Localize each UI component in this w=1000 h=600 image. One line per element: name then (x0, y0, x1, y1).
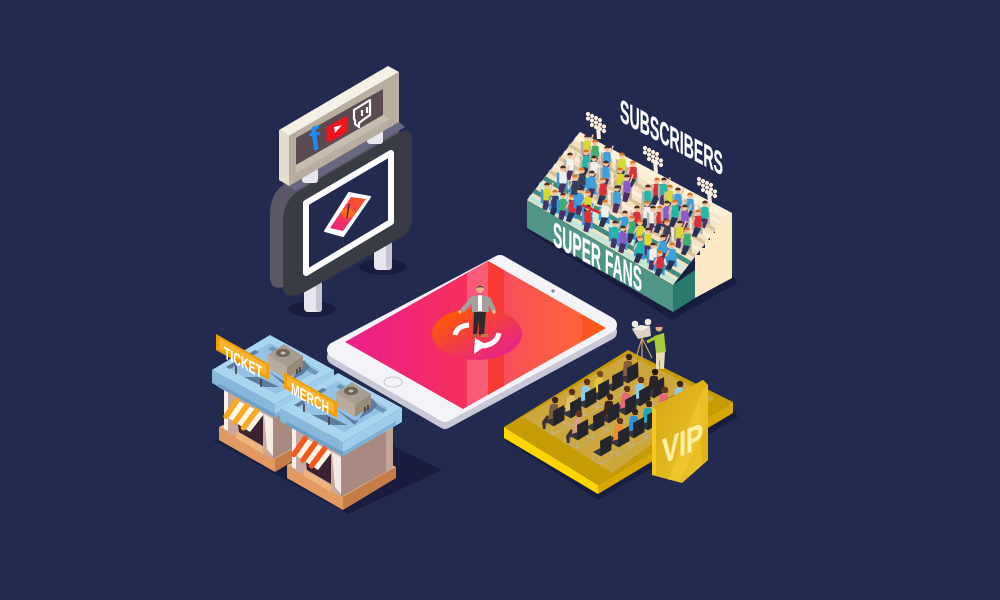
presenter (458, 285, 496, 337)
billboard (270, 66, 412, 317)
screen side face (270, 123, 399, 288)
stadium top walkway (575, 132, 732, 220)
tablet (335, 255, 610, 421)
stadium shadow (523, 228, 737, 320)
billboard legs (304, 235, 392, 312)
floodlights (586, 112, 717, 204)
icon: youtube (328, 118, 346, 141)
icon: phone (325, 193, 370, 236)
stores (212, 334, 442, 514)
top sign (279, 66, 399, 186)
camera operator (647, 324, 666, 369)
screen front face (283, 131, 412, 296)
tablet side (335, 270, 609, 421)
billboard leg shadows (288, 259, 407, 317)
vip shield (652, 380, 708, 483)
vip platform (504, 350, 733, 494)
white screen frame (306, 153, 391, 273)
stadium dark corner (673, 270, 695, 312)
icon: facebook: f (307, 119, 324, 158)
stores shadow (213, 420, 442, 514)
red banner (582, 205, 600, 213)
vip label: VIP (662, 415, 703, 472)
stadium upper cream rows (549, 138, 721, 256)
icon: twitch (354, 100, 370, 127)
vip section (502, 319, 738, 500)
vip shadow (502, 408, 738, 500)
home button (384, 377, 402, 387)
stadium stands base (527, 132, 726, 285)
stage disc (432, 308, 522, 360)
ticket label: TICKET (224, 343, 262, 382)
tablet body (335, 263, 609, 414)
stadium lower teal rows (529, 178, 690, 282)
tablet screen (345, 261, 606, 409)
stadium crowd (541, 134, 711, 278)
merch store (280, 372, 402, 510)
stadium (523, 93, 737, 320)
posts of top sign (302, 128, 383, 183)
stadium: SUPER FANS (553, 214, 642, 300)
merch label: MERCH (291, 379, 329, 418)
vip seating (542, 354, 690, 464)
stadium cream side (695, 213, 732, 298)
tv camera on tripod (632, 319, 652, 362)
screen top edge (289, 122, 405, 191)
stadium: SUBSCRIBERS (620, 93, 723, 183)
camera dot (551, 289, 555, 293)
stadium front wall (527, 200, 673, 312)
icon: refresh arrows (455, 325, 499, 354)
ticket store (212, 334, 334, 472)
